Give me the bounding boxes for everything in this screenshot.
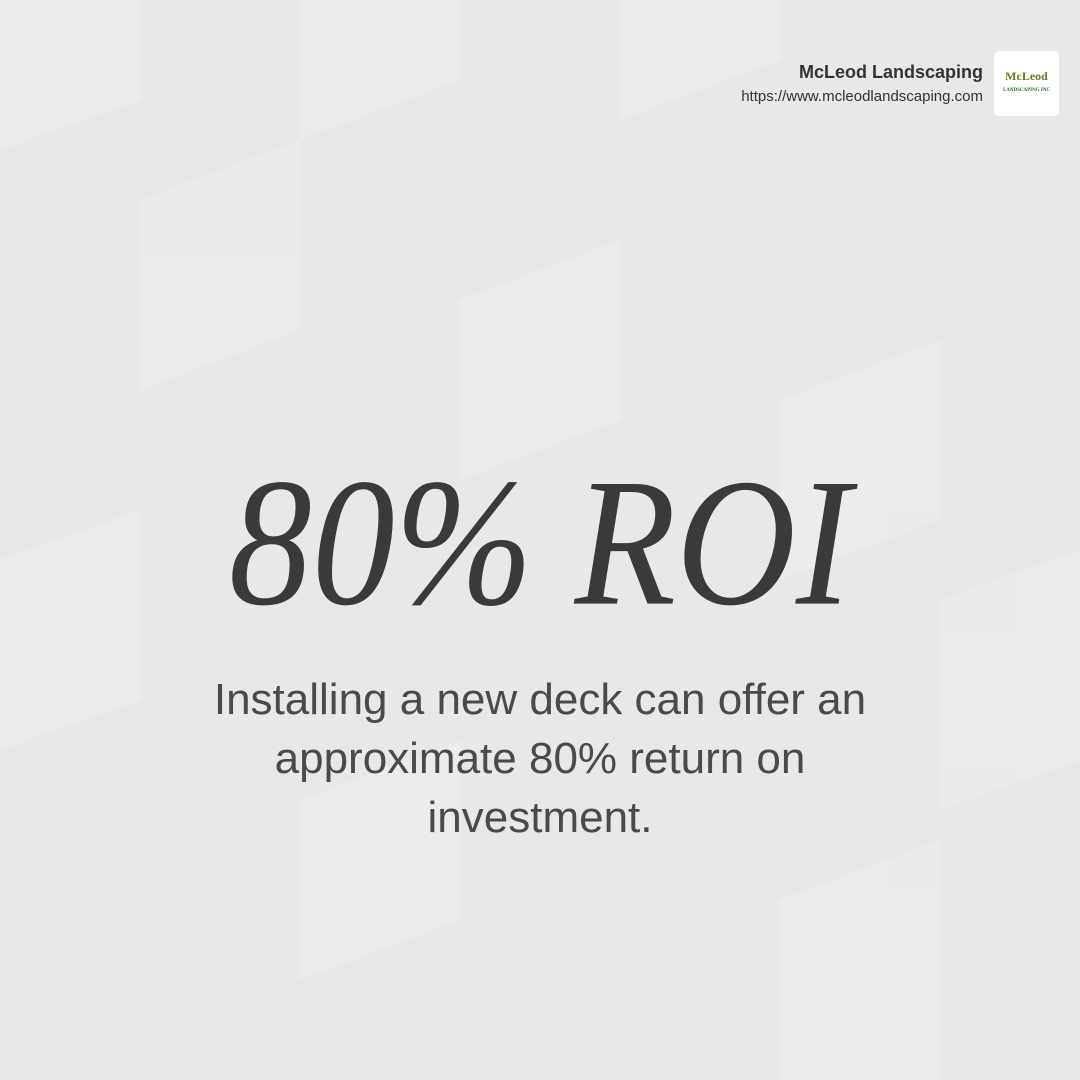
- logo: [994, 51, 1059, 116]
- logo: McLeod: [1005, 69, 1048, 83]
- brand text: https://www.mcleodlandscaping.com: [741, 88, 983, 105]
- brand text: [741, 62, 983, 105]
- brand text: McLeod Landscaping: [799, 62, 983, 82]
- logo: LANDSCAPING INC: [1003, 88, 1050, 93]
- body text: Installing a new deck can offer an approximate 80% return on investment.: [214, 675, 866, 842]
- title: 80% ROI: [229, 441, 851, 643]
